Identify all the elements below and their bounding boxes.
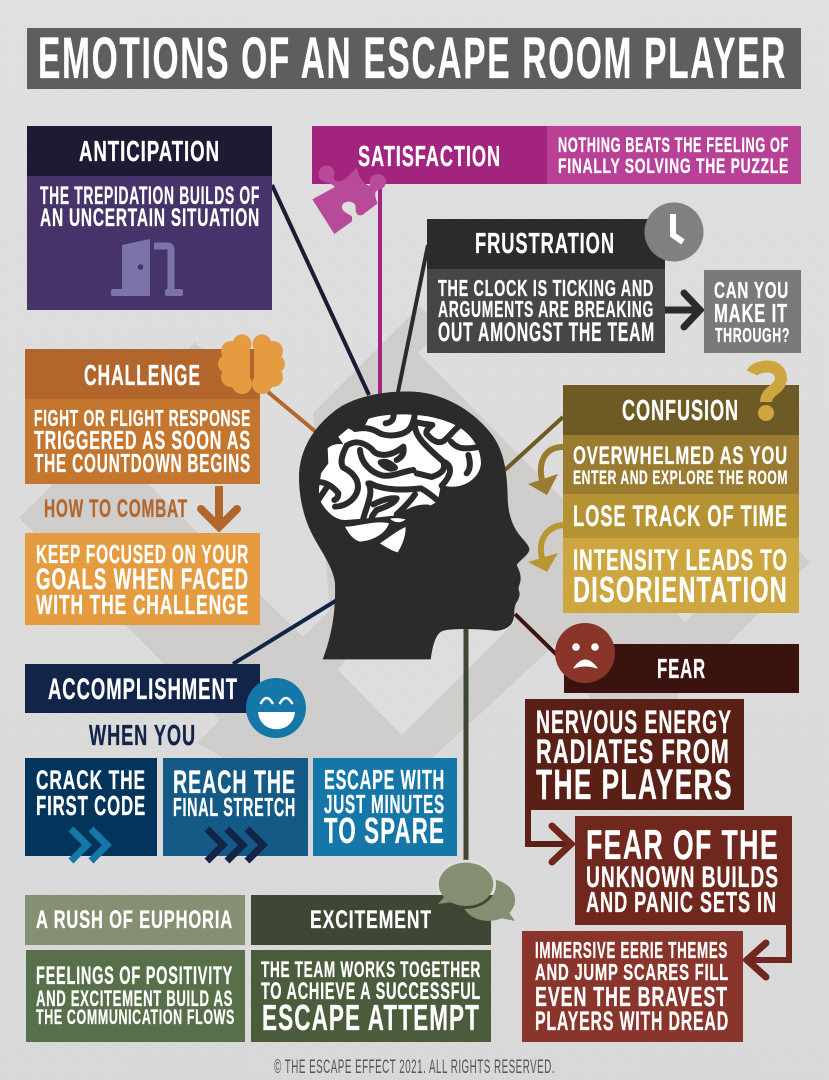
text: challenge description xyxy=(34,405,251,478)
box: fear of the unknown xyxy=(575,816,792,925)
box: the team works together xyxy=(251,950,491,1042)
icon: triple chevron xyxy=(207,829,263,861)
box: how to combat the challenge: GOALS WHEN FACED xyxy=(36,563,249,596)
arrow: fear step one to two xyxy=(528,810,571,862)
panel: challenge xyxy=(25,334,285,625)
text: challenge description: TRIGGERED AS SOON AS xyxy=(34,427,251,455)
icon: door xyxy=(111,239,183,296)
heading: accomplishment: ACCOMPLISHMENT xyxy=(48,673,238,706)
arrow: down to combat xyxy=(201,486,237,527)
text: anticipation description: THE TREPIDATION BUILDS OF xyxy=(40,182,260,210)
heading: challenge: CHALLENGE xyxy=(84,360,201,392)
icon: clock xyxy=(644,202,704,262)
arrow: fear step two to three xyxy=(747,925,789,977)
icon: speech bubbles xyxy=(438,861,515,921)
arrow: curved confusion arrow two xyxy=(528,525,563,572)
box: the team works together: THE TEAM WORKS TOGETHER xyxy=(261,957,481,982)
text: frustration description: THE CLOCK IS TICKING AND xyxy=(438,275,654,301)
heading: fear: FEAR xyxy=(657,653,706,684)
box: feelings of positivity: THE COMMUNICATION FLOWS xyxy=(36,1006,235,1029)
box: reach the final stretch: FINAL STRETCH xyxy=(173,792,296,822)
callout: can you make it through: MAKE IT xyxy=(714,298,788,328)
box: escape with just minutes to spare: ESCAPE WITH xyxy=(324,764,445,795)
callout: can you make it through: CAN YOU xyxy=(714,277,789,303)
box: escape with just minutes to spare xyxy=(313,758,457,856)
box: the team works together: TO ACHIEVE A SUCCESSFUL xyxy=(261,978,481,1005)
text: confusion stages xyxy=(573,442,788,610)
connector lines from the head to each emotion xyxy=(233,184,563,866)
text: frustration description xyxy=(438,275,655,347)
box: how to combat the challenge: WITH THE CHALLENGE xyxy=(36,589,249,620)
text: frustration description: ARGUMENTS ARE BREAKING xyxy=(438,296,654,322)
text: challenge description: FIGHT OR FLIGHT RESPONSE xyxy=(34,405,251,431)
box: the team works together: ESCAPE ATTEMPT xyxy=(262,997,480,1038)
text: challenge description: THE COUNTDOWN BEGINS xyxy=(34,450,251,478)
icon: puzzle piece xyxy=(312,165,386,234)
icon: double chevron xyxy=(71,829,107,861)
panel: excitement xyxy=(25,861,515,1042)
box: how to combat the challenge xyxy=(25,533,260,625)
arrow: curved confusion arrow one xyxy=(528,447,563,495)
heading: satisfaction: SATISFACTION xyxy=(358,141,501,173)
icon: sad face xyxy=(555,623,615,683)
box: escape with just minutes to spare: JUST MINUTES xyxy=(324,789,445,819)
box: crack the first code: CRACK THE xyxy=(36,765,146,795)
heading: confusion: CONFUSION xyxy=(622,395,739,427)
text: frustration description: OUT AMONGST THE TEAM xyxy=(438,317,655,347)
panel: anticipation xyxy=(27,126,272,310)
box: immersive eerie themes xyxy=(522,931,743,1042)
text: anticipation description: AN UNCERTAIN SITUATION xyxy=(40,204,260,232)
box: feelings of positivity xyxy=(26,950,245,1042)
text: satisfaction description xyxy=(558,134,789,178)
box: nervous energy xyxy=(525,699,744,810)
panel: confusion xyxy=(528,366,799,613)
box: crack the first code xyxy=(25,758,157,861)
box: reach the final stretch: REACH THE xyxy=(173,764,296,800)
arrow: frustration to question xyxy=(665,293,700,327)
panel: frustration xyxy=(427,202,801,353)
box: feelings of positivity: FEELINGS OF POSITIVITY xyxy=(36,962,233,990)
box: feelings of positivity: AND EXCITEMENT BUILD AS xyxy=(36,986,233,1011)
heading: anticipation: ANTICIPATION xyxy=(79,136,220,168)
heading: excitement xyxy=(251,895,491,945)
text: anticipation description xyxy=(40,182,260,232)
box: escape with just minutes to spare: TO SPARE xyxy=(324,810,445,851)
icon: smiling face xyxy=(246,678,306,738)
box: reach the final stretch xyxy=(163,758,308,861)
box: crack the first code: FIRST CODE xyxy=(36,790,146,821)
panel: fear xyxy=(522,623,799,1042)
label: how to combat: HOW TO COMBAT xyxy=(44,495,188,523)
icon: question mark xyxy=(752,366,781,421)
icon: brain xyxy=(218,334,285,394)
label: when you: WHEN YOU xyxy=(89,720,196,752)
footer: copyright: © THE ESCAPE EFFECT 2021. ALL RIGHTS RESERVED. xyxy=(274,1057,555,1078)
central head with brain xyxy=(299,391,529,659)
callout: can you make it through xyxy=(704,270,801,353)
box: immersive eerie themes: EVEN THE BRAVEST xyxy=(535,981,728,1012)
box: a rush of euphoria: A RUSH OF EUPHORIA xyxy=(36,906,233,934)
panel: accomplishment xyxy=(25,664,457,861)
heading: frustration: FRUSTRATION xyxy=(475,228,615,260)
box: a rush of euphoria xyxy=(25,895,245,945)
panel: satisfaction xyxy=(312,126,801,234)
box: how to combat the challenge: KEEP FOCUSED ON YOUR xyxy=(36,539,249,569)
heading: excitement: EXCITEMENT xyxy=(310,906,432,934)
